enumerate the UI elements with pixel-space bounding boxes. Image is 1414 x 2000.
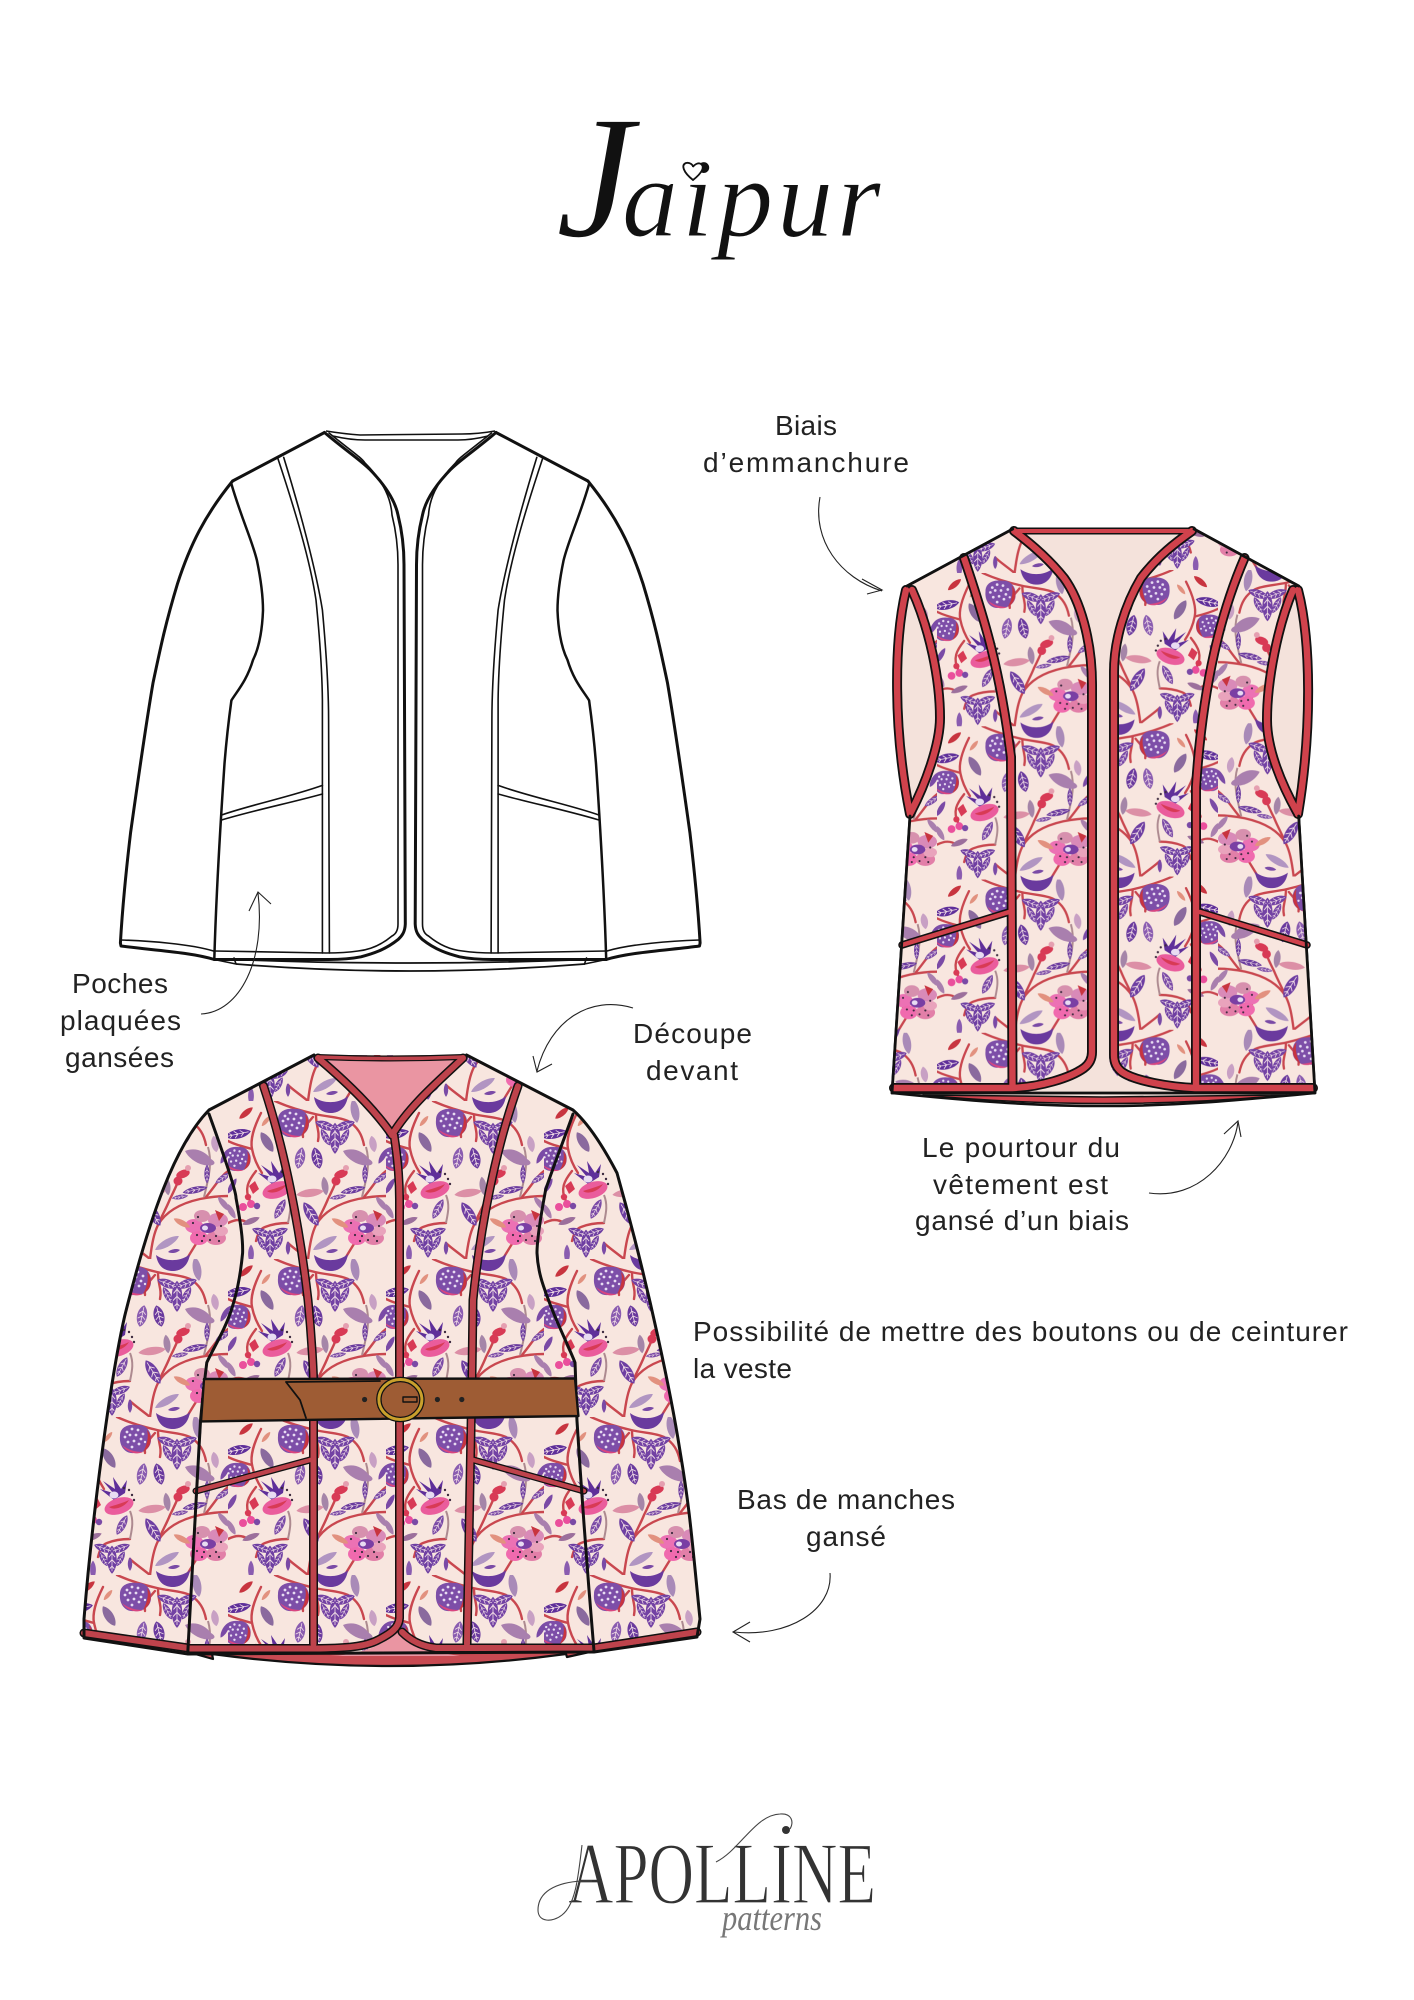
label: poches: Poches <box>72 968 168 999</box>
icon: heart above the i <box>683 163 703 180</box>
label: pourtour: Le pourtour du <box>922 1132 1120 1163</box>
back neck binding <box>326 431 495 440</box>
jacket body fabric <box>84 1055 700 1654</box>
belt holes <box>362 1397 464 1402</box>
label: boutons ou ceinture: Possibilité de mettre des boutons ou de ceinturer <box>693 1316 1348 1347</box>
pink lining neck <box>316 1057 465 1133</box>
label: boutons ou ceinture: la veste <box>693 1353 792 1384</box>
label: poches: plaquées <box>60 1005 181 1036</box>
illustration: jacket with belt <box>84 1055 700 1666</box>
title <box>556 80 885 274</box>
arrow: poches <box>201 892 271 1014</box>
label: boutons ou ceinture <box>693 1316 1348 1384</box>
belt <box>201 1378 578 1421</box>
title: J <box>556 80 641 274</box>
arrow: biais <box>819 497 882 594</box>
logo: patterns <box>719 1898 822 1938</box>
left front panel <box>892 529 1097 1093</box>
label: découpe devant: devant <box>646 1055 738 1086</box>
jacket bindings <box>84 1057 697 1648</box>
belt flap <box>286 1381 380 1418</box>
label: bas de manches: Bas de manches <box>737 1484 955 1515</box>
vest lining <box>892 529 1315 1106</box>
back hem <box>236 960 585 971</box>
pink lining hem <box>330 1630 460 1656</box>
label: découpe devant <box>633 1018 752 1086</box>
vest bindings <box>894 531 1313 1088</box>
label: poches <box>60 968 181 1073</box>
belt buckle <box>379 1380 422 1420</box>
vest outer outline <box>892 529 1315 1093</box>
arrow: découpe <box>533 1005 633 1072</box>
title: aipur <box>622 137 885 261</box>
line drawing: white jacket <box>120 431 700 971</box>
label: bas de manches <box>737 1484 955 1552</box>
label: pourtour: vêtement est <box>933 1169 1108 1200</box>
label: biais d'emmanchure: Biais <box>775 410 837 441</box>
arrow: bas de manches <box>733 1573 830 1642</box>
vest back hem <box>923 1095 1287 1104</box>
arrow: pourtour <box>1149 1121 1241 1194</box>
jacket back and lining <box>188 1651 594 1666</box>
label: pourtour <box>915 1132 1129 1236</box>
label: biais d'emmanchure <box>703 410 909 478</box>
illustration: sleeveless vest <box>892 529 1315 1106</box>
logo flourishes <box>538 1814 792 1920</box>
right front panel <box>1109 529 1315 1093</box>
label: bas de manches: gansé <box>806 1521 886 1552</box>
logo <box>538 1814 876 1938</box>
label: biais d'emmanchure: d’emmanchure <box>703 447 909 478</box>
label: découpe devant: Découpe <box>633 1018 752 1049</box>
label: poches: gansées <box>65 1042 174 1073</box>
logo: APOLLINE <box>568 1826 876 1923</box>
jacket outlines and armholes <box>84 1055 700 1654</box>
label: pourtour: gansé d’un biais <box>915 1205 1129 1236</box>
